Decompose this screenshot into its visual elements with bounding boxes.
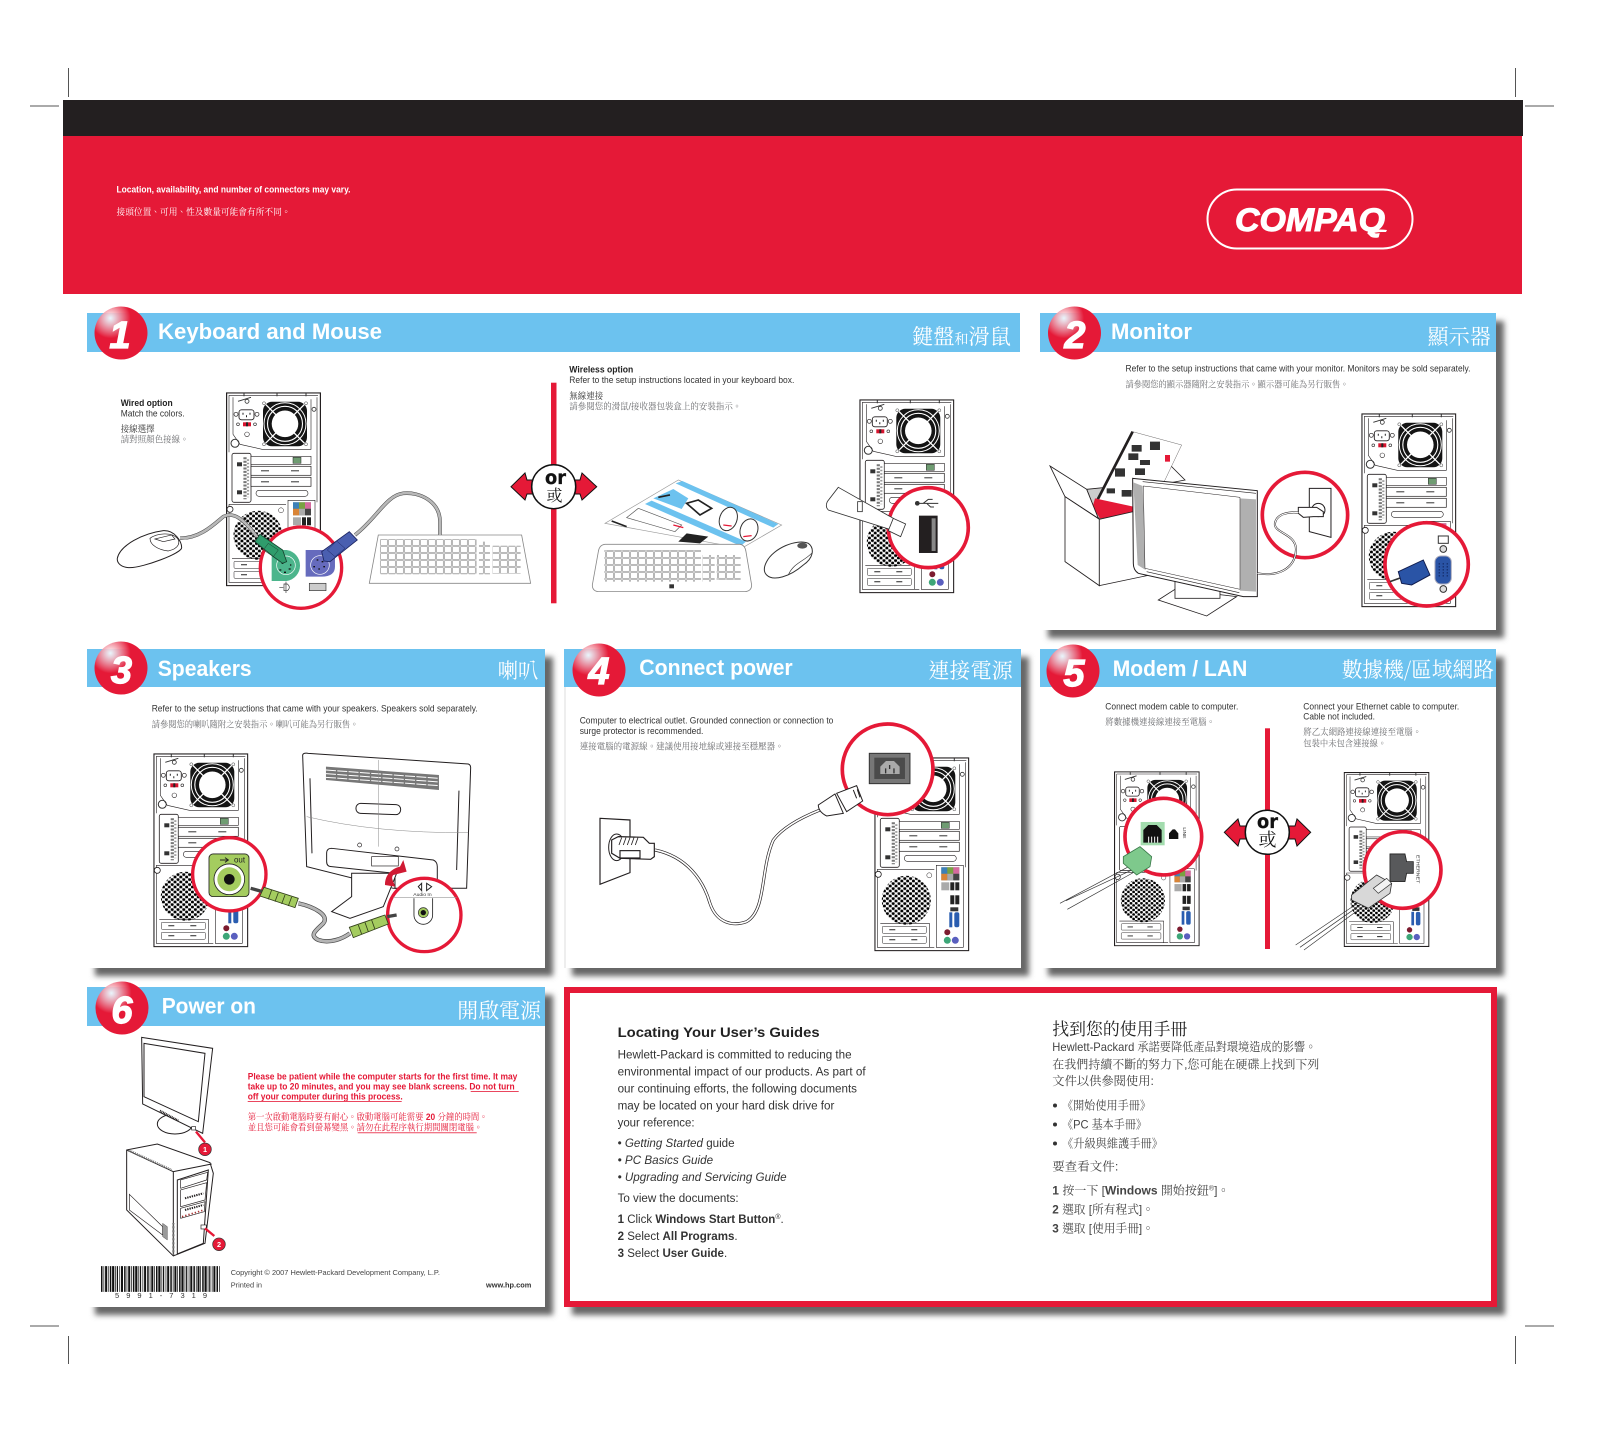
- or divider: [511, 383, 597, 603]
- wireless option text: Refer to the setup instructions located in your keyboard box.: [569, 375, 794, 385]
- Chinese guide text: 3 選取 [使用手冊]。: [1052, 1220, 1154, 1235]
- modem text: Connect modem cable to computer.: [1105, 701, 1238, 711]
- marker 2: 2: [217, 1240, 221, 1249]
- power on illustration: [127, 1037, 225, 1256]
- keyboard cable: [355, 493, 440, 535]
- wireless option text: 無線連接: [569, 390, 603, 401]
- wired option text: 請對照顏色接線。: [121, 434, 189, 444]
- English guide text: .: [780, 1214, 784, 1226]
- barcode: 5991-7319: [115, 1291, 207, 1300]
- monitor power cable: [1257, 512, 1298, 574]
- panel 6 shadow: [95, 995, 553, 1315]
- English guide text: • Getting Started guide: [618, 1138, 735, 1150]
- Chinese guide text: 2 選取 [所有程式]。: [1052, 1201, 1154, 1216]
- Chinese guide text: Hewlett-Packard 承諾要降低產品對環境造成的影響。: [1052, 1039, 1316, 1054]
- panel 6 header: [87, 982, 545, 1034]
- copyright: Printed in: [231, 1281, 262, 1290]
- English guide text: [618, 1024, 866, 1260]
- header banner: [63, 100, 1523, 294]
- tower: wireless: [860, 400, 954, 593]
- or divider: or: [545, 467, 567, 489]
- speakers illustration: [193, 753, 471, 952]
- computer tower: [127, 1144, 213, 1256]
- tower: power: [875, 758, 969, 951]
- panel 1 header: 1: [109, 315, 131, 357]
- panel 4 header: [564, 644, 1021, 696]
- panel 5 header: Modem / LAN: [1113, 656, 1247, 681]
- VGA callout: [1385, 523, 1468, 606]
- Chinese guide text: 找到您的使用手冊: [1052, 1020, 1187, 1039]
- Chinese guide text: 《開始使用手冊》: [1062, 1097, 1151, 1112]
- English guide text: environmental impact of our products. As part of: [618, 1066, 866, 1078]
- panel: locating your user's guides: [567, 990, 1494, 1304]
- power cable: [655, 810, 820, 924]
- wireless mouse: [764, 542, 812, 578]
- copyright: Copyright © 2007 Hewlett-Packard Development Company, L.P.: [231, 1268, 440, 1277]
- green plug: [255, 534, 287, 563]
- Chinese guide text: 《升級與維護手冊》: [1062, 1135, 1163, 1150]
- marker 1: [196, 1132, 211, 1156]
- wired option text: 接線選擇: [121, 423, 155, 434]
- English guide text: our continuing efforts, the following documents: [618, 1083, 857, 1095]
- panel 4 header: 連接電源: [928, 655, 1014, 685]
- modem text: 將數據機連接線連接至電腦。: [1105, 716, 1215, 727]
- English guide text: your reference:: [618, 1117, 695, 1129]
- panel 5 header: 5: [1063, 653, 1085, 695]
- panel 5: modem / LAN: [1040, 644, 1496, 968]
- or divider: or: [1257, 811, 1279, 833]
- wireless option text: Wireless option: [569, 364, 633, 374]
- panel 5 header: 數據機/區域網路: [1342, 654, 1494, 684]
- panel 2: monitor: [1040, 306, 1496, 630]
- or divider: 或: [546, 487, 563, 505]
- instruction sheet: [605, 480, 782, 548]
- modem callout: [1060, 798, 1202, 909]
- English guide text: • PC Basics Guide: [618, 1155, 713, 1167]
- ethernet text: [1303, 701, 1459, 749]
- wireless illustration: [592, 480, 812, 592]
- Chinese guide text: ®: [1209, 1184, 1215, 1192]
- wireless option text: [569, 364, 794, 412]
- English guide text: Hewlett-Packard is committed to reducing the: [618, 1049, 852, 1061]
- PS/2 callout circle: [260, 527, 342, 608]
- Chinese guide text: 要查看文件:: [1052, 1158, 1118, 1173]
- power on warning: 第一次啟動電腦時要有耐心。啟動電腦可能需要 20 分鐘的時間。: [248, 1111, 488, 1122]
- speakers text: Refer to the setup instructions that came with your speakers. Speakers sold separately.: [152, 704, 478, 714]
- copyright: [231, 1268, 532, 1290]
- English guide text: 3 Select User Guide.: [618, 1248, 727, 1260]
- audio cable: [251, 888, 397, 941]
- panel 3 shadow: [95, 657, 553, 976]
- panel 2 shadow: [1048, 321, 1504, 638]
- connect power text: Computer to electrical outlet. Grounded connection or connection to: [580, 716, 833, 726]
- ethernet text: Connect your Ethernet cable to computer.: [1303, 701, 1459, 711]
- Chinese guide text: 在我們持續不斷的努力下,您可能在硬碟上找到下列: [1052, 1056, 1319, 1071]
- connect power text: surge protector is recommended.: [580, 726, 703, 736]
- guide panel shadow: [572, 995, 1505, 1315]
- panel 3: speakers: [87, 642, 545, 968]
- wired connection illustration: [117, 493, 531, 608]
- panel 6 header: 開啟電源: [457, 995, 542, 1025]
- header black bar: [63, 100, 1523, 136]
- tower: LAN: [1344, 773, 1429, 946]
- connector note: 接頭位置、可用、性及數量可能會有所不同。: [116, 206, 290, 217]
- tower: modem: [1115, 772, 1199, 946]
- English guide text: Locating Your User’s Guides: [618, 1024, 820, 1040]
- Chinese guide text: 《PC 基本手冊》: [1062, 1116, 1147, 1131]
- green audio plugs: [260, 887, 388, 938]
- connector note: [116, 184, 350, 217]
- monitor text: 請參閱您的顯示器隨附之安裝指示。顯示器可能為另行販售。: [1126, 378, 1348, 390]
- power on warning: off your computer during this process.: [248, 1092, 403, 1102]
- marker 1: 1: [203, 1145, 207, 1154]
- English guide text: ®: [775, 1213, 781, 1221]
- tower: speakers: [154, 754, 248, 947]
- panel 3 header: 3: [111, 650, 132, 692]
- panel 1 header: Keyboard and Mouse: [158, 319, 382, 344]
- panel 2 header: Monitor: [1111, 319, 1192, 344]
- audio out callout: [193, 838, 266, 911]
- panel 1 header: [87, 306, 1020, 360]
- power on warning: [248, 1071, 519, 1133]
- computer end plug: [818, 786, 863, 816]
- panel 4 header: 4: [587, 651, 610, 693]
- Chinese guide text: ]。: [1214, 1183, 1229, 1197]
- ethernet text: 將乙太網路連接線連接至電腦。: [1303, 726, 1421, 737]
- panel 6: power on: [87, 982, 545, 1307]
- mouse: [117, 531, 182, 568]
- ethernet text: Cable not included.: [1303, 712, 1375, 722]
- Chinese guide text: 1 按一下 [Windows 開始按鈕: [1052, 1183, 1209, 1197]
- monitor back: [303, 753, 471, 918]
- wireless option text: 請參閱您的滑鼠/接收器包裝盒上的安裝指示。: [569, 400, 741, 412]
- LAN callout: ETHERNET: [1415, 855, 1421, 883]
- wired option text: Match the colors.: [121, 408, 185, 418]
- power on warning: Please be patient while the computer starts for the first time. It may: [248, 1071, 517, 1081]
- barcode: [101, 1279, 220, 1300]
- box and guide: [1050, 432, 1185, 586]
- audio in callout: [388, 878, 461, 952]
- ethernet text: 包裝中未包含連接線。: [1303, 738, 1386, 749]
- Compaq logo: [1208, 190, 1412, 248]
- English guide text: may be located on your hard disk drive for: [618, 1100, 835, 1112]
- monitor: [142, 1037, 213, 1134]
- English guide text: 2 Select All Programs.: [618, 1231, 738, 1243]
- USB callout and dongle: [826, 487, 968, 568]
- wired option text: Wired option: [121, 398, 173, 408]
- panel 3 header: 喇叭: [498, 655, 538, 685]
- panel 6 header: Power on: [162, 993, 256, 1018]
- English guide text: To view the documents:: [618, 1193, 739, 1205]
- panel 2 header: 2: [1063, 315, 1086, 357]
- panel 1 header: 鍵盤和滑鼠: [912, 321, 1011, 351]
- panel 4: connect power: [564, 644, 1021, 968]
- modem text: [1105, 701, 1238, 727]
- monitor text: Refer to the setup instructions that came with your monitor. Monitors may be sold separately.: [1126, 364, 1470, 374]
- connect power text: 連接電腦的電源線。建議使用接地線或連接至穩壓器。: [580, 740, 784, 751]
- power callout: [842, 724, 933, 815]
- or divider: 或: [1258, 830, 1276, 850]
- wireless keyboard: [592, 544, 752, 592]
- modem callout: LINE: [1181, 827, 1187, 839]
- or divider: [1224, 728, 1311, 949]
- Chinese guide text: 文件以供參閱使用:: [1052, 1073, 1154, 1088]
- Chinese guide text: [1052, 1020, 1319, 1235]
- modem and LAN callouts: [1060, 798, 1441, 950]
- panel 3 header: Speakers: [158, 656, 252, 681]
- purple plug: [322, 532, 357, 562]
- connect power text: [580, 716, 833, 751]
- monitor text: [1126, 364, 1470, 390]
- monitor: [1133, 478, 1257, 616]
- keyboard: [369, 535, 531, 583]
- power illustration: [600, 724, 933, 924]
- panel 2 header: [1040, 306, 1496, 360]
- panel 1: keyboard and mouse: [87, 306, 1020, 622]
- Compaq logo: COMPAQ: [1235, 202, 1385, 238]
- audio in callout: Audio In: [413, 892, 432, 898]
- wall plug: [1298, 488, 1331, 537]
- panel 3 header: [87, 642, 545, 694]
- box, monitor and cable illustration: [1050, 432, 1348, 616]
- power on warning: take up to 20 minutes, and you may see blank screens. Do not turn: [248, 1081, 515, 1091]
- mouse cable: [180, 515, 257, 538]
- power on warning: 並且您可能會看到螢幕變黑。請勿在此程序執行期間關閉電腦。: [248, 1122, 482, 1133]
- panel 4 header: Connect power: [639, 655, 793, 680]
- speakers text: 請參閱您的喇叭隨附之安裝指示。喇叭可能為另行販售。: [152, 718, 358, 729]
- panel 5 header: [1040, 644, 1496, 698]
- English guide text: • Upgrading and Servicing Guide: [618, 1172, 787, 1184]
- wired option text: [121, 398, 189, 444]
- power callout: [1262, 472, 1348, 558]
- panel 4 shadow: [572, 657, 1029, 976]
- English guide text: 1 Click Windows Start Button: [618, 1214, 775, 1226]
- panel 6 header: 6: [111, 990, 133, 1032]
- LAN callout: [1296, 832, 1441, 950]
- tower: monitor: [1362, 414, 1456, 607]
- connector note: Location, availability, and number of connectors may vary.: [116, 184, 350, 194]
- tower: wired: [227, 393, 320, 586]
- marker 2: [205, 1228, 225, 1251]
- panel 2 header: 顯示器: [1428, 321, 1491, 351]
- audio out callout: out: [234, 856, 246, 865]
- panel 5 shadow: [1048, 657, 1504, 976]
- copyright: www.hp.com: [485, 1281, 532, 1290]
- red arrow: [385, 860, 407, 887]
- speakers text: [152, 704, 478, 729]
- wall outlet and plug: [600, 818, 654, 884]
